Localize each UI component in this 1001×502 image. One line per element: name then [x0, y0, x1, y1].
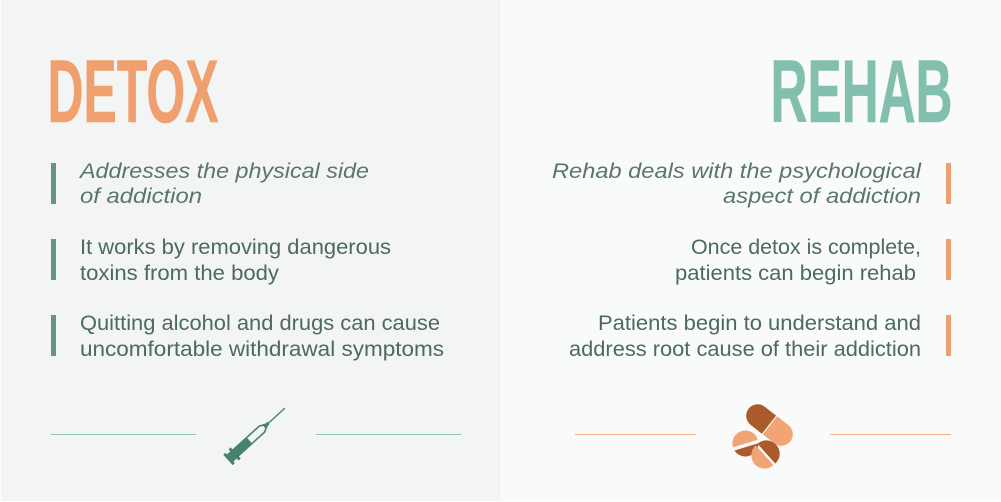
detox point 3: Quitting alcohol and drugs can cause	[80, 311, 440, 335]
detox point 2	[51, 235, 391, 285]
detox point 3	[51, 311, 444, 361]
rehab point 2	[675, 235, 951, 285]
capsule	[742, 400, 797, 450]
rehab point 3	[569, 311, 951, 361]
detox point 2: toxins from the body	[80, 261, 279, 285]
rehab point 3: Patients begin to understand and	[598, 311, 921, 335]
round tablet left	[729, 427, 762, 460]
detox point 3: uncomfortable withdrawal symptoms	[80, 337, 444, 361]
rehab point 1: aspect of addiction	[723, 184, 921, 208]
rehab point 1	[552, 159, 951, 208]
round tablet right	[746, 435, 785, 474]
rehab point 3: address root cause of their addiction	[569, 337, 921, 361]
rehab point 2: patients can begin rehab	[675, 261, 916, 285]
detox point 2: It works by removing dangerous	[80, 235, 391, 259]
detox point 1: of addiction	[80, 184, 202, 208]
panel: detox	[1, 0, 501, 501]
icon: pills	[729, 400, 797, 474]
detox point 1	[51, 159, 369, 208]
rehab point 1: Rehab deals with the psychological	[552, 159, 922, 183]
heading: detox: DETOX	[48, 41, 218, 141]
detox point 1: Addresses the physical side	[78, 159, 369, 183]
panel: rehab	[502, 0, 1001, 501]
rehab point 2: Once detox is complete,	[691, 235, 921, 259]
icon: syringe	[223, 403, 290, 466]
